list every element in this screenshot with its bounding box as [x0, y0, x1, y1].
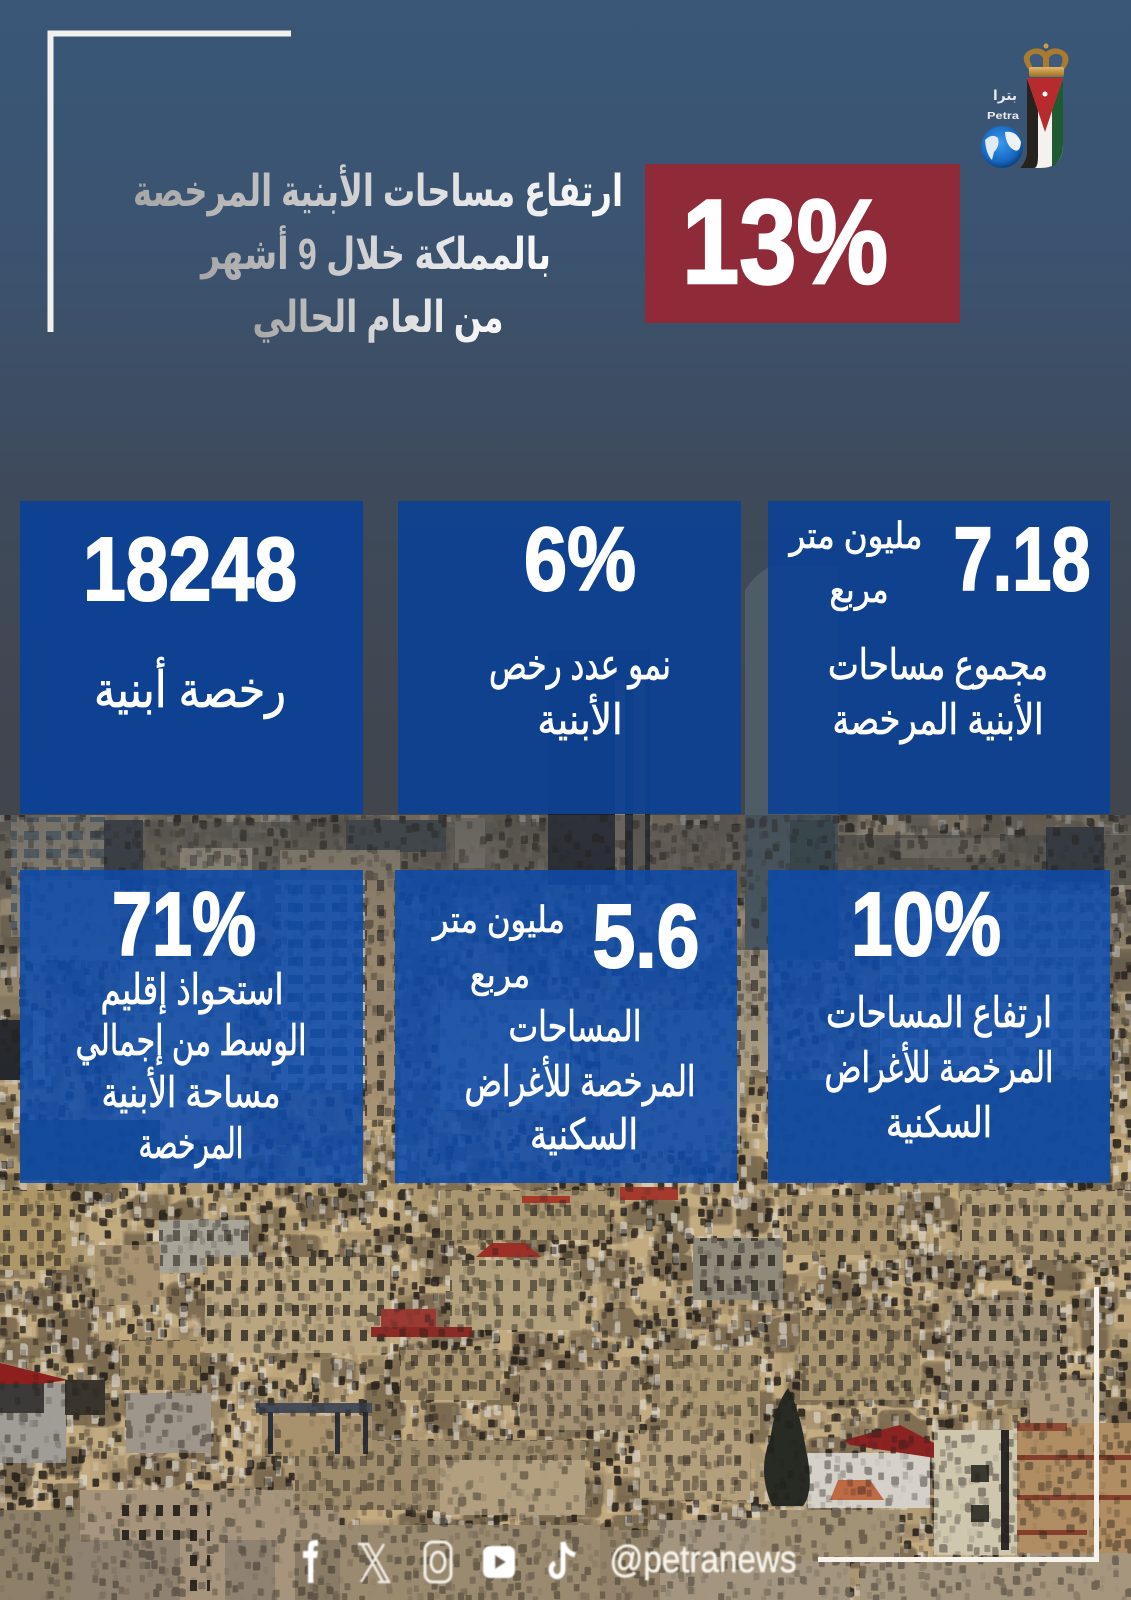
icon: Jordan flag: [1020, 78, 1063, 168]
cypress tree: [764, 1388, 810, 1506]
title: [133, 164, 623, 343]
foreground buildings: [0, 1187, 1131, 1600]
card: central region share 71%: مساحة الأبنية: [102, 1066, 280, 1116]
card: residential area 5.6: مليون متر: [431, 899, 565, 941]
card: residential area 5.6: المساحات: [508, 1003, 642, 1050]
lower left block: [80, 1490, 340, 1600]
social media bar: [303, 1539, 796, 1583]
card: residential area growth 10%: السكنية: [886, 1099, 992, 1146]
card: central region share 71%: الوسط من إجمالي: [76, 1017, 306, 1066]
card: residential area growth 10%: [768, 870, 1110, 1183]
icon: tiktok: [551, 1542, 575, 1577]
title: من العام الحالي: [252, 293, 504, 343]
red percentage box: 13%: [682, 175, 888, 309]
card: residential area 5.6: [395, 870, 737, 1183]
card: residential area 5.6: المرخصة للأغراض: [464, 1055, 696, 1106]
mid-town blocks: [0, 1190, 1131, 1430]
tan building with stripes: [1017, 1423, 1131, 1553]
icon: facebook: [303, 1540, 318, 1583]
title: ارتفاع مساحات الأبنية المرخصة: [133, 164, 623, 217]
card: total licensed area 7.18: مربع: [830, 569, 888, 611]
handle: @petranews: [610, 1539, 796, 1581]
title: بالمملكة خلال 9 أشهر: [199, 225, 551, 280]
logo text: بترا: [993, 87, 1017, 104]
top-left corner bracket: [50, 34, 291, 332]
card: permits growth 6%: الأبنية: [538, 693, 622, 743]
card: total licensed area 7.18: الأبنية المرخصة: [832, 693, 1044, 744]
card: permits growth 6%: [398, 501, 741, 814]
background: city photograph: [0, 566, 1131, 1600]
bottom-right corner bracket: [818, 1287, 1096, 1560]
card: permits growth 6%: 6%: [524, 510, 636, 610]
card: central region share 71%: 71%: [112, 875, 256, 975]
red percentage box: [645, 164, 960, 323]
cream tower: [934, 1430, 1017, 1555]
card: 18248 building permits: 18248: [83, 520, 297, 620]
card: central region share 71%: استحواذ إقليم: [100, 966, 284, 1015]
pergola: [262, 1416, 372, 1456]
icon: globe: [981, 126, 1023, 168]
skyline black tower: [548, 650, 650, 885]
card: residential area growth 10%: المرخصة للأغراض: [824, 1041, 1054, 1092]
icon: crown: [1024, 44, 1069, 77]
card: total licensed area 7.18: مجموع مساحات: [828, 641, 1048, 689]
buildings behind lower cards: [0, 880, 1110, 1180]
skyline tower: [745, 566, 838, 960]
card: central region share 71%: المرخصة: [138, 1120, 244, 1168]
logo text: Petra: [987, 110, 1019, 122]
card: residential area 5.6: السكنية: [530, 1111, 638, 1158]
card: 18248 building permits: رخصة أبنية: [94, 657, 286, 719]
icon: youtube: [483, 1546, 515, 1578]
background: sky: [0, 0, 1131, 815]
card: permits growth 6%: نمو عدد رخص: [489, 641, 671, 689]
icon: X: [358, 1544, 389, 1582]
icon: instagram: [425, 1542, 451, 1582]
card: total licensed area 7.18: 7.18: [954, 510, 1090, 610]
logo: Petra news agency: [981, 44, 1069, 168]
card: total licensed area 7.18: [768, 501, 1110, 814]
card: residential area growth 10%: ارتفاع المساحات: [826, 989, 1052, 1037]
card: residential area 5.6: مربع: [470, 954, 530, 996]
logo text: [987, 87, 1019, 122]
red roofs: [476, 1243, 541, 1257]
white building: [808, 1453, 930, 1508]
card: central region share 71%: [20, 870, 363, 1183]
card: residential area growth 10%: 10%: [851, 875, 1001, 975]
card: 18248 building permits: [20, 501, 363, 814]
card: residential area 5.6: 5.6: [592, 887, 700, 987]
card: total licensed area 7.18: مليون متر: [788, 515, 922, 557]
